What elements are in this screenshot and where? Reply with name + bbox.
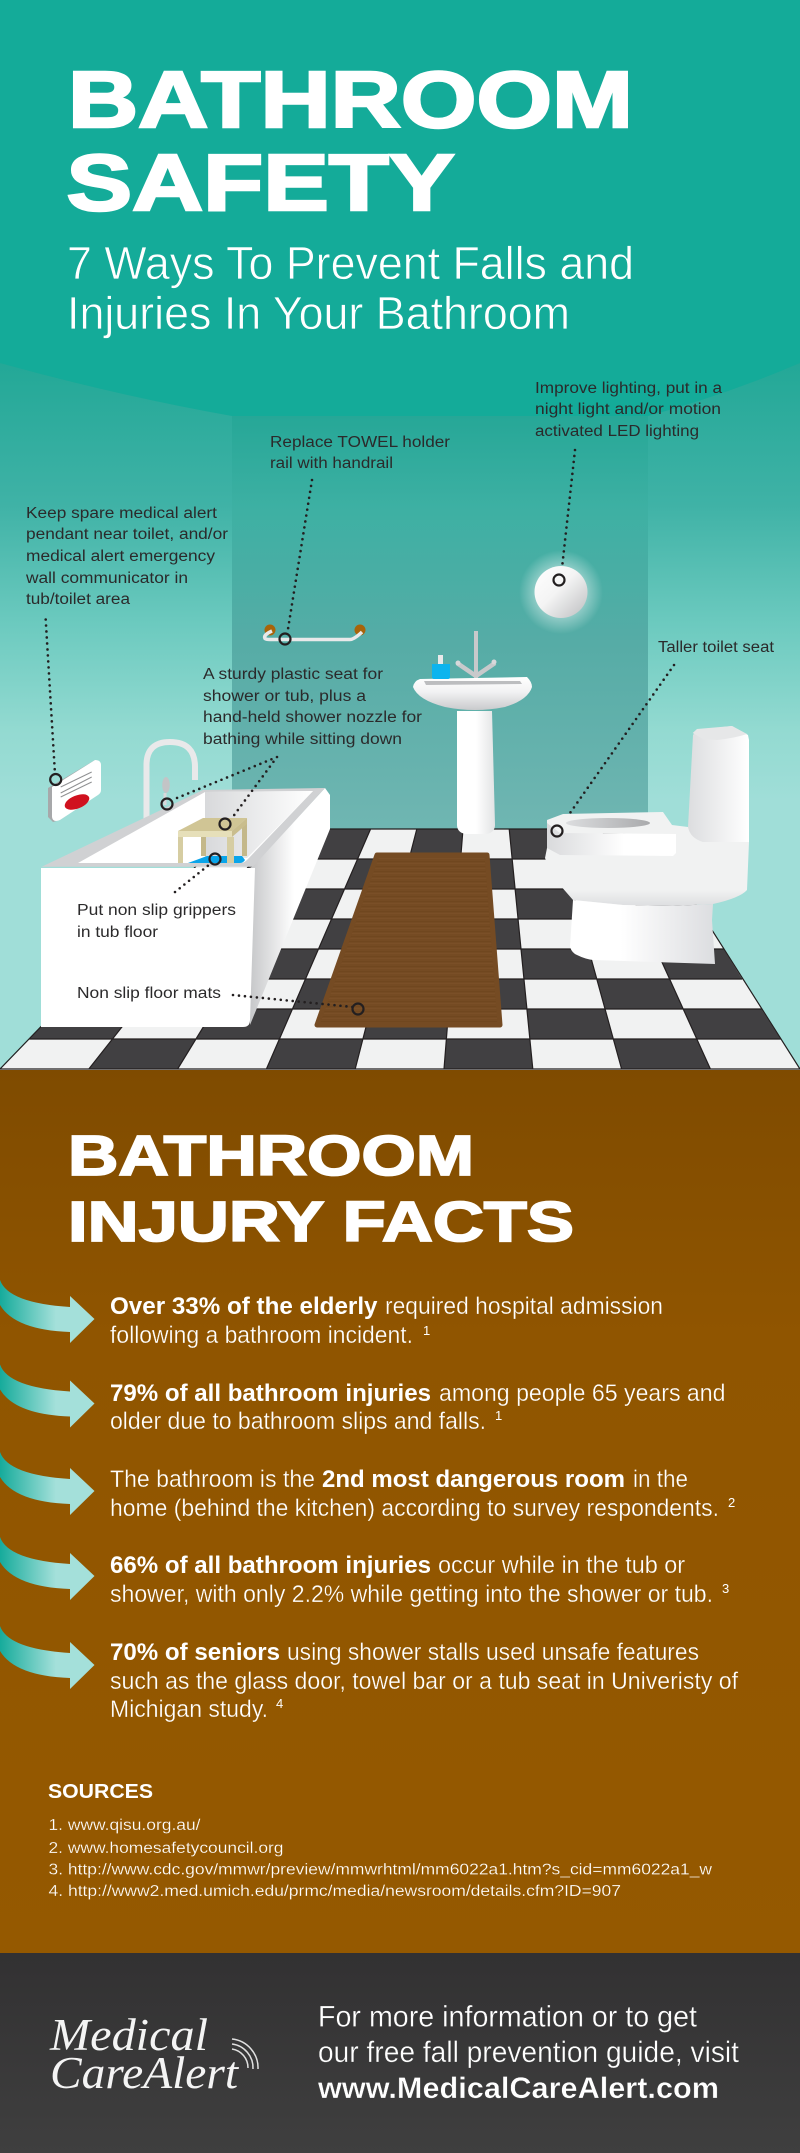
callout leader lines and markers bbox=[46, 450, 674, 1014]
callout: medical alert: wall communicator in bbox=[25, 570, 188, 587]
callout: medical alert bbox=[25, 505, 228, 608]
fact 5: 4 bbox=[276, 1696, 283, 1711]
fact 2: 79% of all bathroom injuries bbox=[110, 1380, 431, 1407]
fact 4: 66% of all bathroom injuries bbox=[110, 1552, 431, 1579]
fact 4: shower, with only 2.2% while getting into the shower or tub. bbox=[110, 1581, 713, 1608]
arrow 4 bbox=[0, 1537, 94, 1600]
callout: plastic seat and shower nozzle: hand-held shower nozzle for bbox=[203, 709, 422, 726]
logo: Medical CareAlert: Medical bbox=[49, 2010, 208, 2060]
sources heading: SOURCES bbox=[48, 1781, 153, 1803]
footer call to action: For more information or to get bbox=[318, 2000, 698, 2034]
subtitle bbox=[67, 237, 634, 339]
panel: bathroom injury facts bbox=[0, 1070, 800, 1953]
fact 1: 1 bbox=[423, 1323, 430, 1338]
callout: medical alert: tub/toilet area bbox=[26, 591, 130, 608]
callout: medical alert: pendant near toilet, and/or bbox=[26, 526, 228, 543]
icon: medical alert wall communicator bbox=[48, 760, 101, 822]
fact 4: occur while in the tub or bbox=[438, 1552, 685, 1579]
title: BATHROOM bbox=[68, 55, 633, 144]
footer call to action: our free fall prevention guide, visit bbox=[318, 2036, 740, 2069]
callout: toilet seat: Taller toilet seat bbox=[658, 639, 775, 656]
callout: lighting: night light and/or motion bbox=[535, 401, 721, 418]
icon: towel rail handrail bbox=[264, 624, 366, 640]
arrow 5 bbox=[0, 1626, 94, 1689]
floor mat bbox=[317, 855, 500, 1025]
callout: lighting: activated LED lighting bbox=[535, 423, 699, 440]
arrow 2 bbox=[0, 1364, 94, 1428]
callout: towel rail: rail with handrail bbox=[270, 455, 393, 472]
fact 5: Michigan study. bbox=[110, 1696, 268, 1723]
fact 5: 70% of seniors bbox=[110, 1639, 280, 1666]
checkered floor bbox=[0, 829, 800, 1070]
fact 4: 3 bbox=[722, 1581, 729, 1596]
icon: hand-held shower nozzle bbox=[162, 777, 170, 805]
title bbox=[66, 55, 633, 227]
callout: medical alert: Keep spare medical alert bbox=[26, 505, 218, 522]
fact 5: using shower stalls used unsafe features bbox=[287, 1639, 699, 1666]
icon: pedestal sink bbox=[413, 631, 532, 834]
title: SAFETY bbox=[66, 138, 454, 227]
facts heading: BATHROOM bbox=[68, 1124, 474, 1188]
subtitle: Injuries In Your Bathroom bbox=[67, 287, 570, 339]
callout: plastic seat and shower nozzle: shower or tub, plus a bbox=[203, 688, 366, 705]
fact 2: among people 65 years and bbox=[439, 1380, 726, 1407]
fact 2 bbox=[110, 1380, 726, 1435]
sources list: 2. www.homesafetycouncil.org bbox=[48, 1840, 284, 1857]
fact 1: required hospital admission bbox=[385, 1293, 663, 1320]
fact 3: The bathroom is the bbox=[110, 1466, 315, 1493]
icon: wall light with glow bbox=[519, 550, 603, 634]
callout: lighting: Improve lighting, put in a bbox=[535, 380, 722, 397]
callout: non slip grippers: Put non slip grippers bbox=[77, 902, 236, 919]
logo: Medical CareAlert: CareAlert bbox=[50, 2048, 240, 2098]
subtitle: 7 Ways To Prevent Falls and bbox=[67, 237, 634, 289]
icon: toilet bbox=[545, 726, 749, 964]
panel: footer bbox=[0, 1953, 800, 2153]
fact 5: such as the glass door, towel bar or a tub seat in Univeristy of bbox=[110, 1668, 738, 1695]
callout: towel rail: Replace TOWEL holder bbox=[270, 434, 450, 451]
facts heading: INJURY FACTS bbox=[68, 1190, 574, 1254]
arrow 1 bbox=[0, 1280, 94, 1343]
callout: towel rail bbox=[270, 434, 450, 472]
callout: floor mats: Non slip floor mats bbox=[77, 985, 221, 1002]
sources list: 4. http://www2.med.umich.edu/prmc/media/newsroom/details.cfm?ID=907 bbox=[48, 1883, 621, 1900]
fact 3: in the bbox=[633, 1466, 688, 1493]
callout: medical alert: medical alert emergency bbox=[26, 548, 215, 565]
sources list bbox=[48, 1817, 713, 1900]
callout: plastic seat and shower nozzle bbox=[203, 666, 422, 748]
fact 3 bbox=[110, 1466, 735, 1522]
callout: plastic seat and shower nozzle: bathing while sitting down bbox=[203, 731, 402, 748]
logo: Medical CareAlert bbox=[49, 2010, 258, 2098]
fact 3: home (behind the kitchen) according to survey respondents. bbox=[110, 1495, 719, 1522]
background: teal bathroom wall scene bbox=[0, 0, 800, 1070]
fact 3: 2 bbox=[728, 1495, 735, 1510]
callout: non slip grippers: in tub floor bbox=[77, 924, 158, 941]
callout: lighting bbox=[535, 380, 722, 440]
arrow 3 bbox=[0, 1452, 94, 1515]
fact 3: 2nd most dangerous room bbox=[322, 1466, 625, 1493]
fact 2: older due to bathroom slips and falls. bbox=[110, 1408, 486, 1435]
footer call to action: www.MedicalCareAlert.com bbox=[317, 2072, 719, 2105]
callout: non slip grippers bbox=[77, 902, 236, 941]
fact 1 bbox=[110, 1293, 663, 1349]
facts heading bbox=[68, 1124, 574, 1254]
icon: bath tub bbox=[41, 742, 330, 1027]
callout: plastic seat and shower nozzle: A sturdy plastic seat for bbox=[203, 666, 383, 683]
fact 2: 1 bbox=[495, 1408, 502, 1423]
sources list: 1. www.qisu.org.au/ bbox=[48, 1817, 201, 1834]
fact 1: Over 33% of the elderly bbox=[110, 1293, 378, 1320]
fact 5 bbox=[110, 1639, 738, 1723]
footer call to action bbox=[317, 2000, 740, 2105]
sources list: 3. http://www.cdc.gov/mmwr/preview/mmwrhtml/mm6022a1.htm?s_cid=mm6022a1_w bbox=[48, 1862, 713, 1878]
fact 4 bbox=[110, 1552, 729, 1608]
icon: tub seat bbox=[178, 818, 247, 863]
fact 1: following a bathroom incident. bbox=[110, 1322, 413, 1349]
